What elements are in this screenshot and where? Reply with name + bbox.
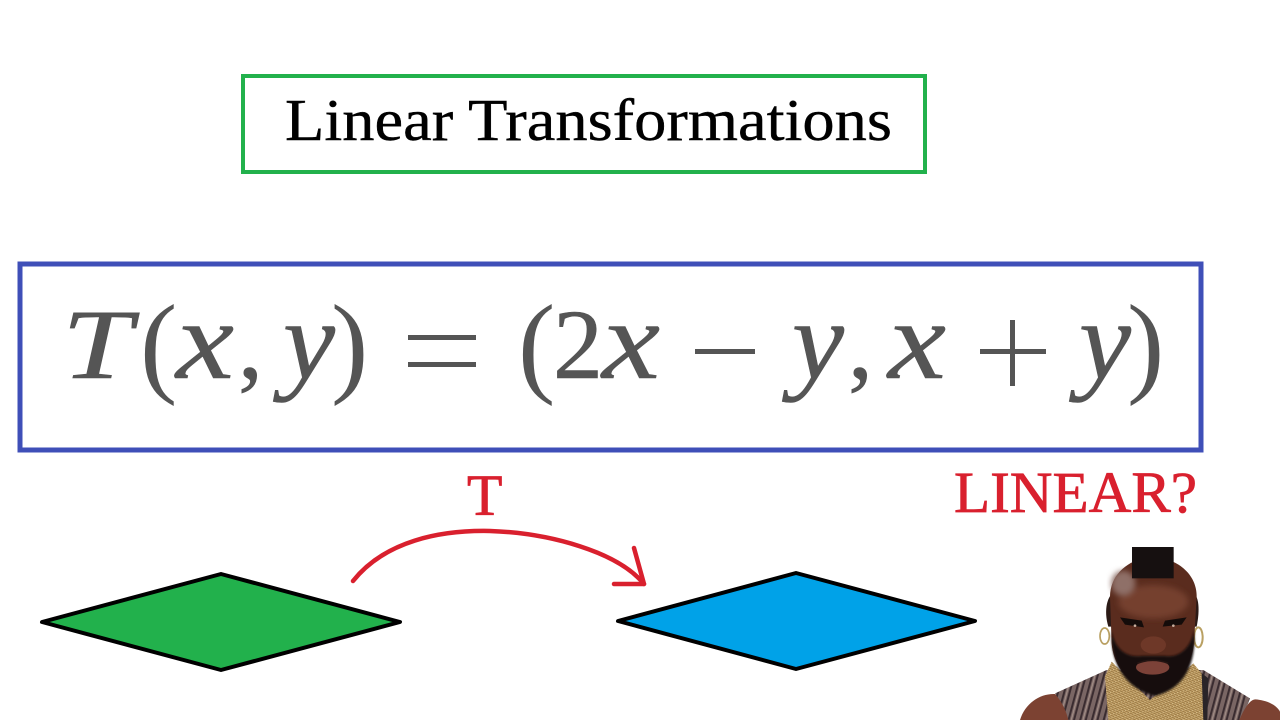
beard <box>1112 630 1194 696</box>
head <box>1110 557 1197 690</box>
equation: x <box>886 279 946 403</box>
gold chains <box>1105 662 1203 720</box>
label: LINEAR?: LINEAR? <box>954 460 1197 525</box>
mohawk <box>1132 547 1174 578</box>
portrait illustration <box>1020 547 1280 720</box>
equation panel <box>20 264 1201 450</box>
equation: y <box>273 279 335 403</box>
equation: ) <box>331 283 368 407</box>
equation: y <box>782 279 844 403</box>
shape: blue rhombus <box>618 573 975 669</box>
lips <box>1136 660 1169 675</box>
equation: x <box>600 279 660 403</box>
shape: green rhombus <box>42 574 400 670</box>
equation: 2 <box>553 289 603 400</box>
forehead highlight <box>1118 585 1188 618</box>
equation: ( <box>518 283 555 407</box>
title text: Linear Transformations <box>285 87 892 153</box>
nose <box>1141 636 1166 654</box>
label: T: T <box>467 463 502 528</box>
brows and eyes <box>1120 617 1187 627</box>
equation: x <box>174 279 234 403</box>
ears and earrings <box>1100 592 1203 647</box>
equation: , <box>848 289 873 400</box>
equation <box>62 279 1164 407</box>
equation: y <box>1069 279 1131 403</box>
equation: , <box>238 289 263 400</box>
equation: ( <box>140 283 177 407</box>
equation: T <box>62 289 140 400</box>
title box <box>243 76 925 172</box>
arrow: transformation T <box>353 531 644 584</box>
equation: ) <box>1127 283 1164 407</box>
shoulders and shirt <box>1020 670 1280 720</box>
